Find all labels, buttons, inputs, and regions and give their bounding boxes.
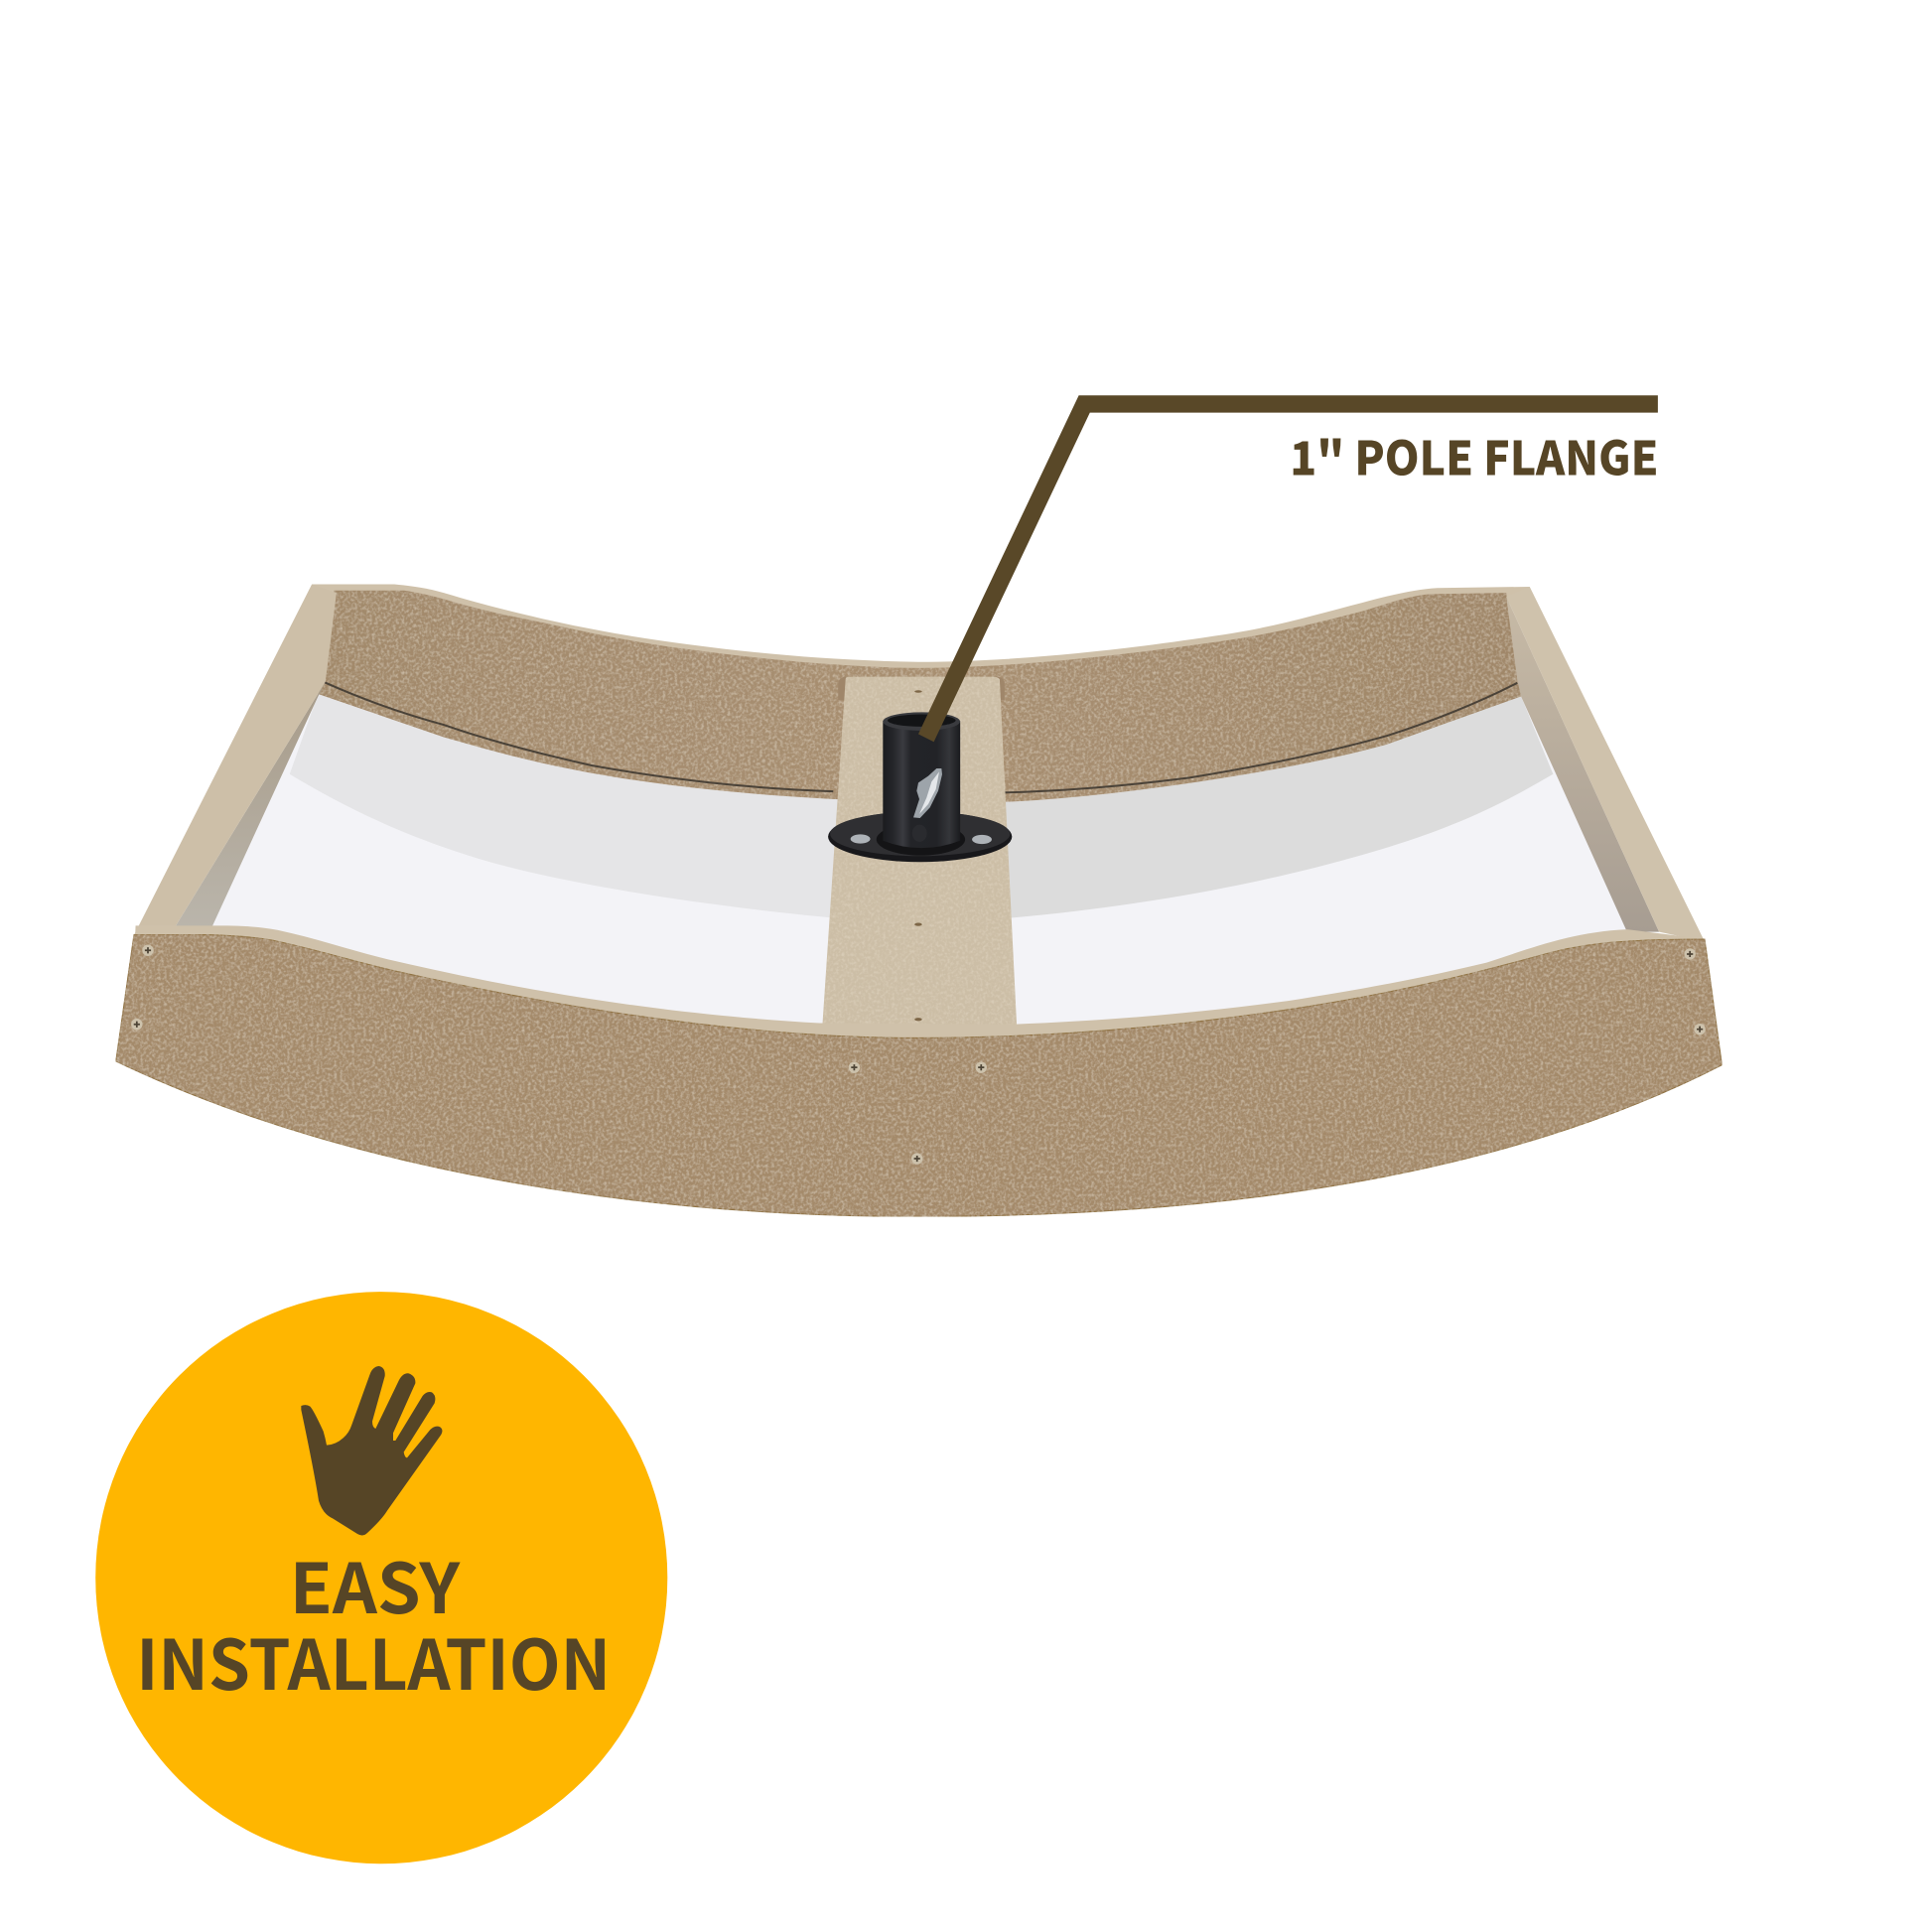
- product: curved tray with pole flange: [116, 584, 1722, 1216]
- pole flange: [828, 712, 1012, 862]
- front panel top lip: [134, 925, 1705, 1060]
- panel screws: [131, 945, 1706, 1165]
- callout label: pole flange: 1" POLE FLANGE: [1290, 421, 1659, 489]
- board end tab: [838, 677, 1005, 700]
- center mounting board: [822, 677, 1017, 1030]
- wing bolt: [913, 768, 942, 818]
- badge: easy installation: [95, 1292, 667, 1863]
- back panel face: [318, 591, 1521, 802]
- right wall inner face: [1506, 597, 1659, 932]
- icon: hand: [301, 1366, 442, 1535]
- callout leader line: [918, 395, 1658, 742]
- floor reflection: right grey area: [992, 696, 1553, 919]
- back panel seam: left: [323, 682, 833, 791]
- flange base plate edge: [828, 811, 1012, 862]
- flange plate top: [830, 812, 1010, 856]
- badge heading line 1: EASY: [290, 1534, 461, 1634]
- flange screw right: [972, 835, 992, 844]
- right wall top lip: [1506, 587, 1705, 942]
- left wall inner face: [175, 682, 326, 927]
- flange weld bead: [912, 825, 927, 842]
- flange socket opening: [888, 714, 956, 727]
- badge circle: [95, 1292, 667, 1863]
- front panel: [116, 934, 1722, 1216]
- left wall top lip: [133, 584, 337, 937]
- flange screw left: [851, 834, 871, 844]
- flange tube collar: [877, 823, 965, 856]
- back panel seam: right: [1004, 683, 1517, 792]
- board surface: [822, 677, 1017, 1030]
- back panel: [312, 584, 1530, 802]
- back panel top lip: [312, 584, 1530, 675]
- tray floor: white surface: [204, 690, 1633, 1047]
- flange socket tube: [883, 721, 960, 848]
- floor reflection: left grey area: [290, 694, 851, 919]
- flange socket rim: [883, 712, 960, 731]
- board pilot holes: [914, 690, 922, 1021]
- badge heading line 2: INSTALLATION: [136, 1610, 611, 1711]
